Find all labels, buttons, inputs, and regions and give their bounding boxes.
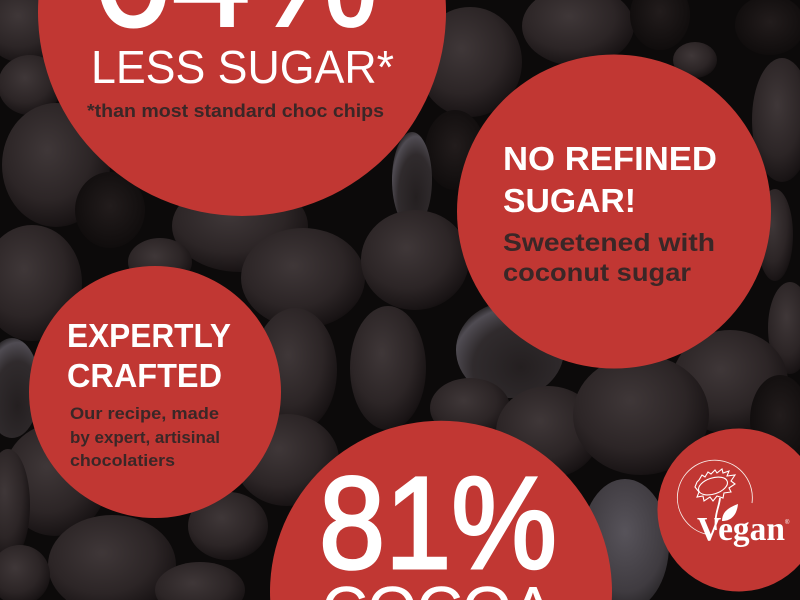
text: recipe description: chocolatiers bbox=[70, 451, 175, 470]
callout: 64% less sugar bbox=[38, 0, 446, 216]
icon: leaf bbox=[722, 504, 738, 521]
text: recipe description: by expert, artisinal bbox=[70, 428, 220, 447]
footnote: *than most standard choc chips bbox=[87, 100, 384, 121]
wordmark: vegan: Vegan bbox=[697, 511, 785, 548]
heading: expertly crafted: CRAFTED bbox=[67, 357, 222, 394]
text: sweetened with coconut sugar: coconut sugar bbox=[503, 259, 691, 287]
callout: no refined sugar bbox=[457, 54, 771, 368]
heading: no refined sugar: SUGAR! bbox=[503, 182, 636, 219]
icon: sunflower bbox=[695, 469, 735, 530]
heading: no refined sugar bbox=[503, 140, 717, 219]
text: sweetened with coconut sugar bbox=[503, 229, 715, 287]
heading: less sugar: LESS SUGAR* bbox=[91, 41, 394, 93]
stat: 81%: 81% bbox=[319, 449, 557, 596]
heading: expertly crafted: EXPERTLY bbox=[67, 317, 231, 354]
vegan logo bbox=[677, 460, 790, 548]
callout: 81% cocoa bbox=[270, 420, 612, 600]
heading: expertly crafted bbox=[67, 317, 231, 394]
heading: no refined sugar: NO REFINED bbox=[503, 140, 717, 177]
text: sweetened with coconut sugar: Sweetened with bbox=[503, 229, 715, 257]
callout: expertly crafted bbox=[29, 266, 281, 518]
text: recipe description bbox=[70, 404, 220, 470]
text: recipe description: Our recipe, made bbox=[70, 404, 219, 423]
registered mark: ® bbox=[785, 519, 790, 526]
badge: vegan bbox=[657, 428, 800, 592]
